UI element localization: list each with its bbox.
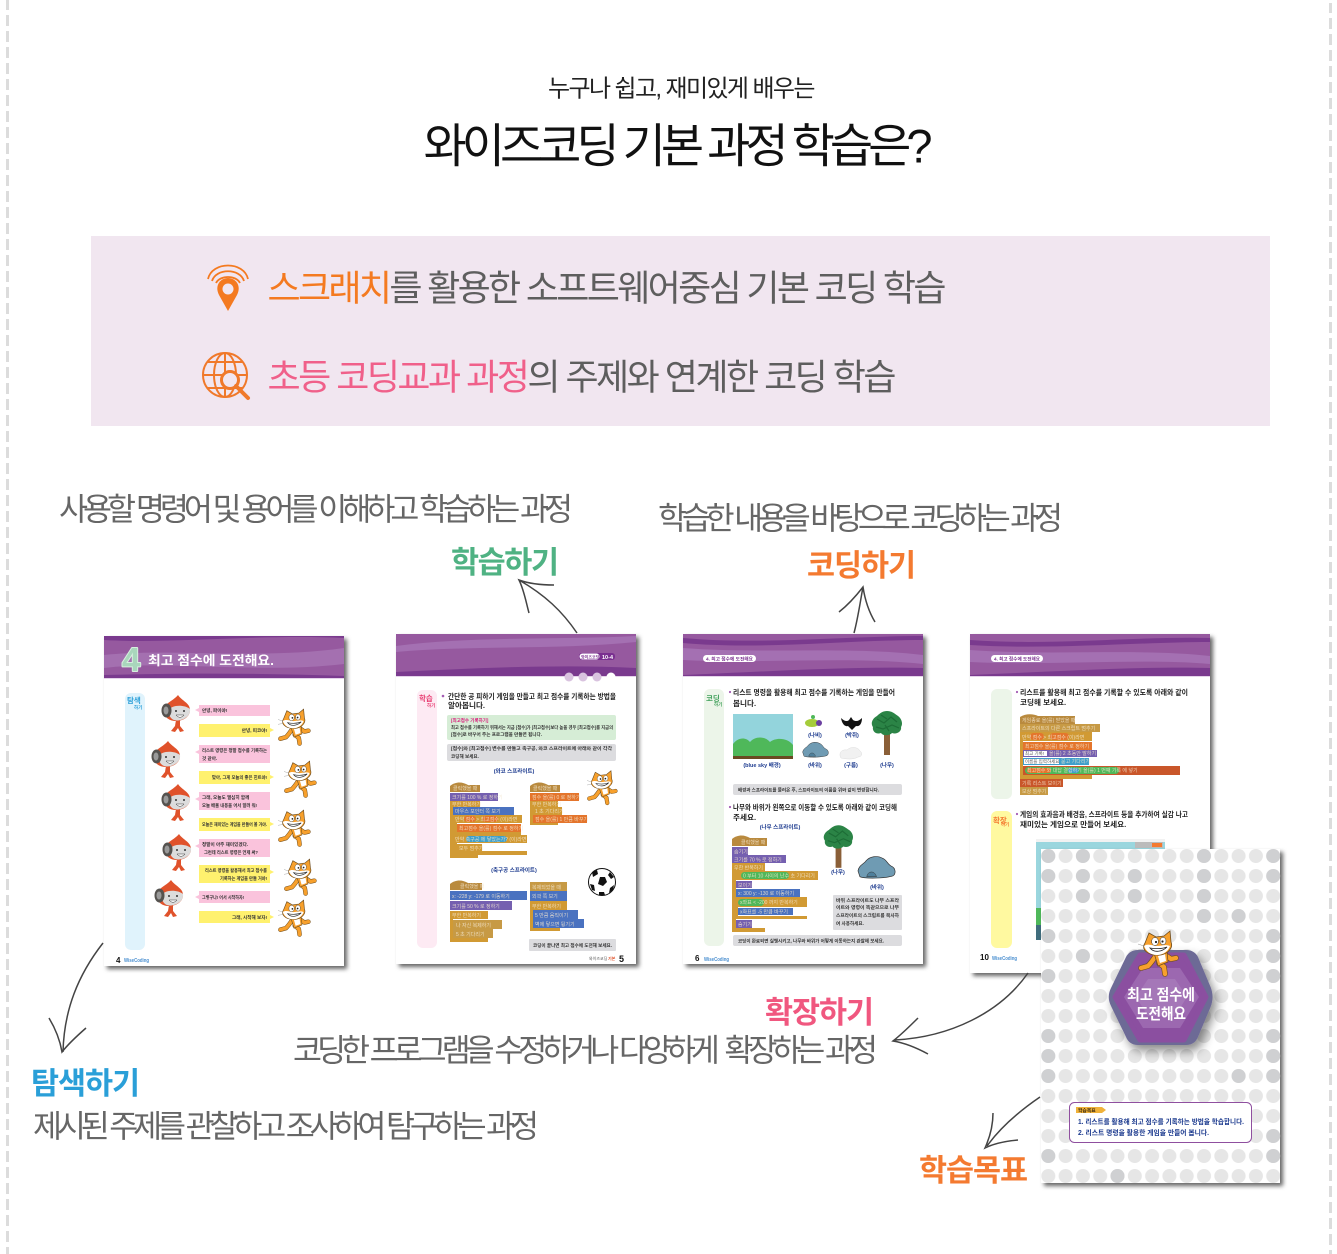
code blocks: list script: 최고 기록!: [1025, 750, 1044, 757]
soccer ball: [588, 868, 616, 896]
code blocks: list script: 을(를) 2 초동안 말하기: [1049, 750, 1096, 757]
extension instruction text: 재미있는 게임으로 만들어 보세요.: [1020, 819, 1126, 829]
description: 코딩하기: 학습한 내용을 바탕으로 코딩하는 과정: [658, 500, 1063, 536]
hexagon badge: 도전해요: [1136, 1005, 1186, 1023]
side tab 학습하기: 학습: [419, 693, 433, 703]
gray instruction box: [점수]와 [최고점수] 변수를 만들고 축구공, 와코 스프라이트에 아래와 같이 각각: [451, 745, 613, 752]
coding instruction text: 리스트를 활용해 최고 점수를 기록할 수 있도록 아래와 같이: [1020, 687, 1188, 697]
dialogue bubbles: 안녕, 파이야!: [202, 707, 228, 714]
page number 10 and logo: WiseCoding: [992, 956, 1017, 962]
subtitle: 누구나 쉽고, 재미있게 배우는: [548, 76, 816, 102]
code blocks: 와코 stack 1: 클릭했을 때: [453, 785, 478, 792]
learning goals box: 1. 리스트를 활용해 최고 점수를 기록하는 방법을 학습합니다.: [1078, 1117, 1244, 1126]
sprite labels: (나무): [880, 761, 894, 769]
page number 10 and logo: [980, 953, 1017, 962]
code blocks: 와코 stack 1: 무한 반복하기: [452, 801, 481, 808]
code blocks: 와코 stack 2: 점수 을(를) 0 로 정하기: [532, 794, 580, 801]
sprite: rock: [803, 742, 828, 757]
code blocks: list script: 묻고 기다리기: [1061, 758, 1090, 765]
code blocks: 나무: 무한 반복하기: [734, 864, 763, 872]
bullet text 1: 스크래치를 활용한 소프트웨어중심 기본 코딩 학습: [268, 268, 946, 308]
code blocks: list script: 최고점수 을(를) 점수 로 정하기: [1025, 743, 1089, 750]
chapter tag: [579, 653, 615, 661]
page number 5: 5: [619, 954, 624, 964]
side tab 코딩하기: 하기: [714, 701, 722, 708]
side tab 학습하기: [417, 690, 437, 948]
code blocks: 와코 stack 1: 만약 축구공 에 닿았는가? (이)라면: [455, 836, 527, 843]
code blocks: 축구공 stack 3: 5 초 기다리기: [456, 931, 485, 938]
code blocks: 와코 stack 1: [450, 782, 527, 858]
code blocks: 축구공 stack 3: 클릭했을 때: [460, 883, 485, 890]
characters: robots and scratch cats: [152, 695, 314, 934]
code blocks: 축구공 stack 4: [530, 882, 584, 931]
gray note box: run: 코딩이 완료되면 실행시키고, 나무와 바위가 어떻게 이동하는지 관찰해 보세요.: [738, 938, 884, 944]
label 와코 스프라이트: (와코 스프라이트): [494, 767, 534, 775]
code blocks: 와코 stack 1: 크기를 100 % 로 정하기: [452, 794, 503, 801]
chapter pill: 4. 최고 점수에 도전해요: [994, 656, 1041, 662]
code blocks: 축구공 stack 4: 외곽 쪽 보기: [532, 893, 558, 900]
gray note box: rock: 여 사용하세요.: [836, 920, 864, 927]
coding instruction text: 코딩해 보세요.: [1020, 697, 1066, 707]
side tab 확장하기: [991, 811, 1012, 948]
dialogue bubbles: 정말이 아주 재미있겠다.: [202, 841, 248, 848]
code blocks: 축구공 stack 4: 복제되었을 때: [532, 884, 561, 891]
scratch cat on badge: [1138, 931, 1176, 974]
page number 5: 기본: [608, 955, 616, 961]
page: 학습하기 spread: [396, 634, 636, 964]
chapter heading: 최고 점수에 도전해요.: [148, 653, 274, 668]
code blocks: 나무: [732, 836, 818, 932]
dialogue bubbles: 그래, 오늘도 열심히 함께: [202, 794, 249, 801]
code blocks: 축구공 stack 4: 5 만큼 움직이기: [535, 912, 568, 919]
lesson intro text: [729, 687, 895, 708]
code blocks: list script: 만약 점수 > 최고점수 (이)라면: [1022, 734, 1085, 741]
arrow: to 코딩하기: [839, 587, 875, 633]
dialogue bubbles: 안녕, 피코야!: [242, 727, 267, 734]
sprite: bat: [841, 717, 862, 730]
gray instruction box: [447, 744, 616, 761]
code blocks: list script: 보상 멈추기: [1022, 788, 1046, 795]
chapter number 4: 4: [122, 641, 141, 678]
gray tip box: [529, 939, 616, 951]
code blocks: 와코 stack 2: [530, 782, 588, 825]
sprite labels: (바위): [870, 883, 884, 891]
badge text: 최고 점수에: [1127, 986, 1195, 1004]
page number 4 and logo: [116, 956, 149, 965]
side tab 확장하기: 확장: [993, 815, 1007, 825]
gray tip box: 코딩이 끝나면 최고 점수에 도전해 보세요.: [533, 942, 612, 949]
side tab 코딩하기: 코딩: [706, 693, 720, 703]
gray note box: rock: [833, 895, 902, 930]
green info box: [447, 715, 616, 740]
gray instruction box: 코딩해 보세요.: [451, 753, 479, 760]
coding instruction text: [1016, 687, 1188, 707]
goals tag: [1076, 1107, 1106, 1114]
code blocks: 나무: x좌표 < -200 까지 반복하기: [740, 899, 798, 906]
heading: 확장하기: 확장하기: [765, 996, 874, 1030]
page: 확장하기 spread: [970, 634, 1210, 973]
dialogue bubbles: 오늘은 재미있는 게임을 만들어 볼 거야.: [202, 821, 267, 828]
gray note box: rock: 스프라이트의 스크립트를 복사하: [836, 912, 900, 919]
chapter tag: 10-4: [602, 655, 614, 661]
step text: 나무와 바위가 왼쪽으로 이동할 수 있도록 아래와 같이 코딩해: [733, 802, 897, 812]
code blocks: list script: 스프라이트의 다른 스크립트 멈추기: [1022, 725, 1095, 732]
extension instruction text: [1016, 809, 1188, 829]
code blocks: 나무: 0 부터 10 사이의 난수 초 기다리기: [743, 872, 815, 880]
code blocks: 축구공 stack 4: 벽에 닿으면 튕기기: [535, 921, 575, 928]
dialogue bubbles: 리스트 명령을 활용해서 최고 점수를: [205, 867, 268, 874]
sprite tree: [824, 825, 853, 868]
sprite: tree: [872, 711, 902, 755]
side tab 탐색하기: [125, 693, 145, 950]
page number 5: 와이즈코딩: [589, 955, 608, 961]
page number 6 and logo: WiseCoding: [704, 957, 729, 963]
page number 6 and logo: 6: [695, 954, 700, 963]
code blocks: list script: 최고점수 와 대답 결합하기 을(를) 1 번째 기록 에 넣기: [1027, 767, 1138, 774]
learning goals box: 2. 리스트 명령을 활용한 게임을 만들어 봅니다.: [1078, 1128, 1209, 1137]
code blocks: 나무: 크기를 70 % 로 정하기: [734, 856, 782, 864]
code blocks: list script: 기록 리스트 보이기: [1022, 780, 1062, 787]
arrow: to 학습하기: [519, 580, 577, 633]
dialogue bubbles: 그렇구나! 어서 시작하자!: [202, 894, 244, 901]
side tab: green: [991, 689, 1012, 799]
page number 4 and logo: WiseCoding: [124, 958, 149, 964]
sprite: butterfly: [805, 715, 822, 727]
step text: [729, 802, 897, 822]
game screenshot: [1036, 839, 1165, 940]
sprite labels: (구름): [844, 762, 858, 769]
code blocks: 나무: x: 300 y: -130 로 이동하기: [738, 890, 794, 897]
code blocks: 나무: 보이기: [738, 882, 752, 889]
heading: 학습목표: 학습목표: [919, 1154, 1028, 1188]
page number 10 and logo: 10: [980, 953, 989, 962]
dot pattern: [1041, 849, 1280, 1183]
gray note box: [733, 784, 902, 795]
side tab 탐색하기: 탐색: [127, 695, 141, 705]
lesson intro text: 간단한 공 피하기 게임을 만들고 최고 점수를 기록하는 방법을: [448, 691, 616, 701]
page number 4 and logo: 4: [116, 956, 121, 965]
chapter pill: [991, 655, 1043, 662]
code blocks: 축구공 stack 3: 나 자신 복제하기: [456, 922, 491, 929]
sprite labels: (바위): [808, 761, 822, 769]
sprite labels: (박쥐): [845, 731, 859, 739]
sprite labels: (나무): [831, 868, 845, 876]
heading: 코딩하기: 코딩하기: [807, 549, 916, 583]
code blocks: 축구공 stack 3: [450, 880, 527, 942]
code blocks: list script: 이름을 입력하세요: [1025, 758, 1059, 765]
code blocks: list script: [1020, 714, 1180, 795]
code blocks: 축구공 stack 4: 무한 반복하기: [532, 903, 561, 910]
icon: location pin with signal: [208, 266, 248, 311]
code blocks: 축구공 stack 3: 크기를 50 % 로 정하기: [452, 903, 500, 910]
green info box: [최고점수 기록하기]: [451, 717, 489, 724]
label 나무 스프라이트: (나무 스프라이트): [760, 823, 800, 831]
extension instruction text: 게임의 효과음과 배경음, 스프라이트 등을 추가하여 실감 나고: [1020, 809, 1188, 819]
lesson intro text: [442, 691, 616, 710]
cover page: [1041, 849, 1280, 1183]
scratch cat: [587, 771, 616, 803]
lesson intro text: 리스트 명령을 활용해 최고 점수를 기록하는 게임을 만들어: [733, 687, 895, 697]
description: 학습하기: 사용할 명령어 및 용어를 이해하고 학습하는 과정: [59, 491, 573, 527]
code blocks: 나무: x좌표를 -5 만큼 바꾸기: [740, 908, 788, 916]
gray note box: rock: 바위 스프라이트도 나무 스프라: [836, 897, 900, 904]
heading: 학습하기: 학습하기: [451, 546, 559, 580]
label 축구공 스프라이트: (축구공 스프라이트): [491, 866, 537, 874]
code blocks: 와코 stack 2: 점수 을(를) 1 만큼 바꾸기: [535, 816, 588, 823]
arrow: to 탐색하기: [49, 943, 103, 1052]
step text: 주세요.: [733, 812, 756, 822]
code blocks: 와코 stack 2: 1 초 기다리기: [535, 808, 564, 815]
sprite labels: (blue sky 배경): [743, 761, 781, 769]
dialogue bubbles: 맞아, 그게 오늘의 좋은 힌트야!: [212, 774, 267, 781]
green info box: [점수]로 바꾸어 주는 프로그램을 만들면 됩니다.: [451, 731, 542, 738]
learning goals box: [1070, 1102, 1252, 1142]
gray note box: rock: 이트와 명령이 똑같으므로 나무: [836, 904, 900, 911]
lesson intro text: 봅니다.: [733, 698, 756, 708]
code blocks: 와코 stack 1: 모두 멈추기: [459, 845, 483, 852]
code blocks: 와코 stack 1: 만약 점수 > 최고점수 (이)라면: [455, 816, 518, 823]
page number 5: [589, 954, 624, 964]
dialogue bubbles: [195, 705, 274, 923]
code blocks: 나무: 클릭했을 때: [741, 839, 766, 846]
dialogue bubbles: 리스트 명령은 정말 점수를 기록하는: [202, 747, 268, 754]
dialogue bubbles: 그래, 시작해 보자!: [232, 914, 267, 921]
code blocks: 축구공 stack 3: x: -228 y: -179 로 이동하기: [452, 893, 510, 900]
side tab 탐색하기: 하기: [134, 704, 142, 711]
code blocks: 와코 stack 1: 최고점수 을(를) 점수 로 정하기: [459, 825, 523, 832]
arrow: to 확장하기: [893, 973, 1028, 1054]
background sprite preview: [733, 714, 793, 759]
bullet text 2: 초등 코딩교과 과정의 주제와 연계한 코딩 학습: [268, 356, 896, 398]
sprite labels: (나비): [808, 731, 822, 739]
chapter pill: [703, 655, 756, 662]
chapter tag: 와이즈코딩: [581, 654, 600, 660]
code blocks: 나무: 숨기기: [738, 921, 752, 928]
heading: 탐색하기: 탐색하기: [31, 1067, 140, 1101]
code blocks: list script: 게임종료 을(를) 받았을 때: [1022, 717, 1076, 724]
chapter pill: 4. 최고 점수에 도전해요: [706, 656, 754, 662]
side tab 학습하기: 하기: [427, 702, 435, 709]
side tab 확장하기: 하기: [1001, 821, 1009, 828]
dialogue bubbles: 기록하는 게임을 만들 거야!: [220, 875, 267, 882]
lesson intro text: 알아봅니다.: [448, 700, 485, 710]
description: 탐색하기: 제시된 주제를 관찰하고 조사하여 탐구하는 과정: [33, 1108, 539, 1144]
page number 6 and logo: [695, 954, 729, 963]
side tab 코딩하기: [704, 689, 724, 946]
code blocks: 와코 stack 2: 클릭했을 때: [533, 785, 558, 792]
green info box: 최고 점수를 기록하기 위해서는 지금 [점수]가 [최고점수]보다 높을 경우 [최고점수]를 지금의: [451, 724, 613, 731]
goals tag: 학습목표: [1078, 1107, 1096, 1114]
page: 탐색하기 spread left: [104, 636, 344, 966]
gray note box: 배경과 스프라이트를 불러온 후, 스프라이트의 이름을 위와 같이 변경합니다.: [738, 786, 879, 794]
sprite rock: [858, 857, 895, 878]
dialogue bubbles: 그런데 리스트 명령은 언제 써?: [204, 849, 258, 856]
icon: globe with magnifier: [203, 353, 248, 398]
description: 확장하기: 코딩한 프로그램을 수정하거나 다양하게 확장하는 과정: [293, 1032, 878, 1068]
sprite: cloud: [840, 747, 862, 759]
sprite labels: [831, 868, 884, 891]
sprite labels: [743, 731, 894, 769]
arrow: to 학습목표: [985, 1097, 1040, 1148]
title: 와이즈코딩 기본 과정 학습은?: [424, 120, 932, 172]
code blocks: 나무: 숨기기: [734, 848, 748, 856]
code blocks: 와코 stack 1: 마우스 포인터 쪽 보기: [455, 808, 501, 815]
gray note box: run: [733, 935, 902, 946]
dialogue bubbles: 오늘 배울 내용을 어서 알려 줘!: [202, 802, 257, 809]
code blocks: 축구공 stack 3: 무한 반복하기: [452, 912, 481, 919]
page: 코딩하기 spread: [683, 634, 923, 964]
hexagon badge: [1109, 950, 1212, 1045]
dialogue bubbles: 것 같아.: [202, 755, 217, 762]
panel: key points: [91, 236, 1270, 426]
code blocks: 와코 stack 2: 무한 반복하기: [532, 801, 561, 808]
